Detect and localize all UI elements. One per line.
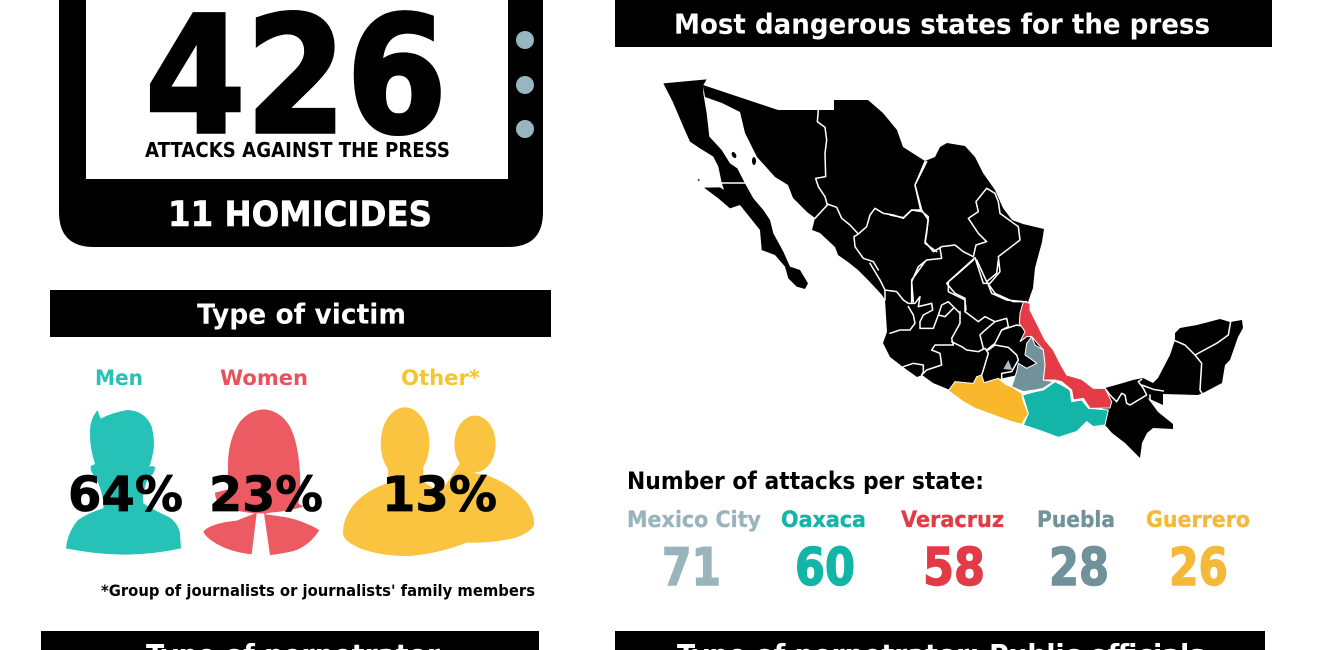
panel: type of victim bbox=[50, 290, 551, 600]
stat: Guerrero: 26 bbox=[1169, 538, 1228, 598]
heading: number of attacks per state: Number of attacks per state: bbox=[627, 467, 984, 495]
Baja California peninsula bbox=[663, 79, 808, 289]
big number caption: ATTACKS AGAINST THE PRESS bbox=[145, 138, 450, 162]
label: other: Other* bbox=[401, 366, 480, 390]
stat: Puebla: Puebla bbox=[1037, 508, 1115, 533]
south-eastern state borders bbox=[1105, 322, 1231, 406]
heading bar: most dangerous states bbox=[615, 0, 1272, 47]
stat: Veracruz: 58 bbox=[923, 538, 985, 598]
stat: Mexico City: Mexico City bbox=[627, 508, 761, 533]
mainland states bbox=[703, 85, 1243, 458]
tablet frame bbox=[59, 0, 543, 247]
north-eastern state borders bbox=[890, 162, 1023, 310]
percentage: men: 64% bbox=[68, 467, 183, 523]
footnote: *Group of journalists or journalists' family members bbox=[101, 581, 535, 600]
homicides count: 11 HOMICIDES bbox=[168, 195, 432, 235]
heading bar: type of victim bbox=[50, 290, 551, 337]
stat: Mexico City bbox=[627, 508, 761, 598]
stat: Oaxaca bbox=[781, 508, 866, 598]
percentage: women: 23% bbox=[209, 467, 323, 523]
stat: Oaxaca: 60 bbox=[795, 538, 855, 598]
highlighted states bbox=[948, 302, 1112, 437]
state: Veracruz bbox=[1019, 302, 1112, 408]
label: women: Women bbox=[220, 366, 308, 390]
stat: Puebla bbox=[1037, 508, 1115, 598]
state: Oaxaca bbox=[1023, 382, 1108, 437]
stat: Mexico City: 71 bbox=[662, 538, 721, 598]
panel: tablet with total attacks bbox=[59, 0, 543, 247]
stat: Guerrero bbox=[1146, 508, 1250, 598]
stat: Veracruz bbox=[901, 508, 1004, 598]
heading bar: most dangerous states: Most dangerous states for the press bbox=[674, 8, 1210, 40]
state: Puebla bbox=[1012, 337, 1053, 392]
stat: Puebla: 28 bbox=[1049, 538, 1109, 598]
state: Mexico City bbox=[1003, 360, 1012, 370]
state: Guerrero bbox=[948, 375, 1028, 424]
heading bar: type of perpetrator bbox=[41, 631, 539, 650]
percentage: other: 13% bbox=[382, 467, 497, 523]
icon: group silhouette bbox=[343, 407, 534, 556]
stat: Veracruz: Veracruz bbox=[901, 508, 1004, 533]
stat: Oaxaca: Oaxaca bbox=[781, 508, 866, 533]
label: men: Men bbox=[95, 366, 143, 390]
icon: man silhouette bbox=[66, 410, 181, 555]
map of Mexico bbox=[663, 79, 1243, 458]
central state borders bbox=[870, 260, 1027, 380]
tablet screen bbox=[86, 0, 508, 179]
stat: Guerrero: Guerrero bbox=[1146, 508, 1250, 533]
icon: woman silhouette bbox=[203, 409, 319, 555]
northern state borders bbox=[815, 110, 937, 270]
panel: most dangerous states bbox=[615, 0, 1272, 598]
tablet buttons bbox=[516, 31, 534, 138]
heading bar: type of victim: Type of victim bbox=[197, 298, 406, 330]
heading bar: type of perpetrator, public officials bbox=[615, 631, 1265, 650]
